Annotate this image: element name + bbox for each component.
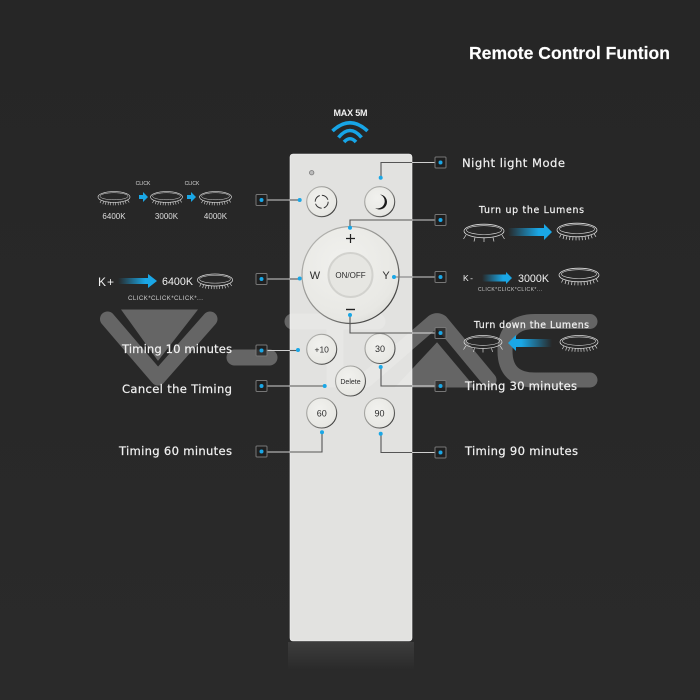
label: cancel the timing: Cancel the Timing: [122, 382, 232, 396]
button: 90: 90: [374, 408, 385, 418]
marker boxes: [256, 157, 446, 458]
watermark overlay on remote: [108, 310, 590, 387]
button: 30: 30: [375, 344, 385, 354]
label: timing 30 minutes: Timing 30 minutes: [464, 379, 577, 393]
button: 60: [307, 398, 337, 428]
panel: K-: 3000K: [518, 273, 550, 285]
button: colour cycle: [307, 187, 337, 217]
indicator LED: [310, 170, 314, 175]
panel: colour temperature cycle: [98, 181, 232, 221]
panel: K+: CLICK*CLICK*CLICK*...: [128, 295, 203, 302]
panel: K+: K+: [98, 275, 114, 289]
control wheel: ON/OFF: [335, 271, 366, 280]
panel: K+: 6400K: [162, 276, 194, 288]
label: timing 90 minutes: Timing 90 minutes: [464, 444, 578, 458]
wifi arcs: [332, 123, 368, 142]
icon: wifi signal range: [332, 108, 368, 142]
marker box dots: [260, 160, 442, 454]
remote body: [290, 154, 412, 641]
watermark logo: [108, 310, 590, 387]
panel: turn up the lumens: [464, 205, 597, 242]
button: 30: [365, 334, 395, 364]
button: 90: [364, 398, 394, 428]
panel: turn up the lumens: Turn up the Lumens: [478, 205, 584, 216]
panel: colour temperature cycle: CLICK: [136, 181, 151, 187]
panel: colour temperature cycle: 6400K: [102, 212, 126, 221]
button: 60: 60: [317, 408, 327, 418]
button: +10: +10: [314, 344, 329, 354]
label: timing 10 minutes: Timing 10 minutes: [121, 342, 232, 356]
label: timing 60 minutes: Timing 60 minutes: [118, 444, 232, 458]
panel: colour temperature cycle: 3000K: [155, 212, 179, 221]
reflection under remote: [288, 642, 414, 670]
panel: K-: CLICK*CLICK*CLICK*...: [478, 287, 542, 293]
panel: K-: K-: [463, 273, 473, 283]
button: +10: [307, 334, 337, 364]
panel: turn down the lumens: Turn down the Lumens: [473, 320, 589, 331]
panel: remote control: [290, 154, 412, 642]
panel: K+: [98, 274, 233, 302]
button: delete: [336, 366, 366, 396]
control wheel: W: [310, 270, 321, 282]
connector dots on remote: [296, 176, 396, 436]
connector lines: [267, 162, 435, 452]
control wheel: Y: [382, 270, 390, 282]
panel: K-: [463, 268, 599, 293]
panel: turn down the lumens: [464, 320, 598, 352]
control wheel: [302, 226, 399, 324]
panel: colour temperature cycle: CLICK: [185, 181, 200, 187]
title: Remote Control Funtion: [469, 43, 670, 63]
panel: colour temperature cycle: 4000K: [204, 212, 228, 221]
button: delete: Delete: [340, 379, 361, 386]
range label: MAX 5M: [334, 108, 368, 118]
button: night light: [365, 187, 395, 217]
label: night light mode: Night light Mode: [462, 156, 565, 170]
